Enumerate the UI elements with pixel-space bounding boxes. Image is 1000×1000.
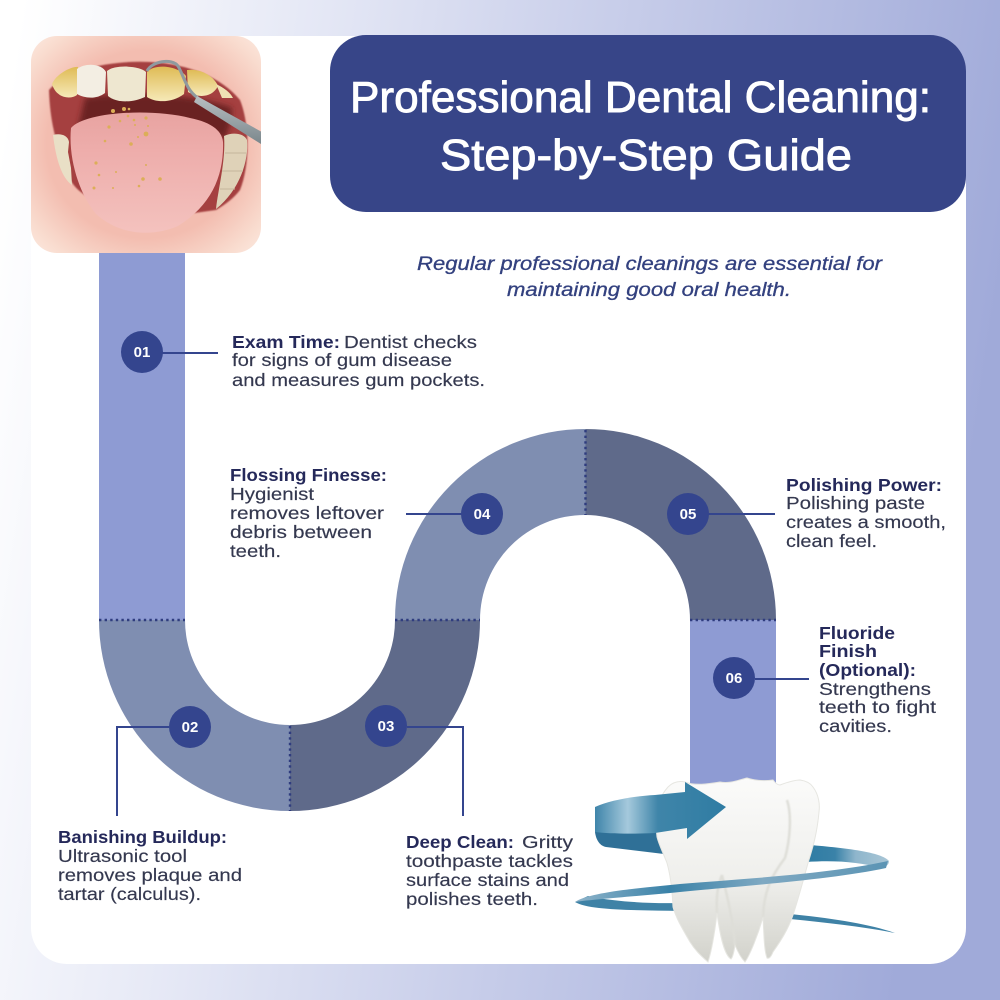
step 01 text: Dentist checks — [344, 332, 477, 352]
step 04 text — [230, 465, 387, 561]
dental scaler handle — [194, 96, 262, 144]
step 01 marker — [121, 331, 218, 373]
title — [350, 73, 931, 180]
tongue — [71, 113, 223, 233]
step 04 text: Flossing Finesse: — [230, 465, 387, 485]
step 04 text: teeth. — [230, 541, 281, 561]
step 03 marker — [365, 705, 463, 816]
step 03 marker: 03 — [378, 718, 394, 735]
subtitle: Regular professional cleanings are essential for — [417, 254, 883, 275]
title: Step-by-Step Guide — [440, 131, 852, 180]
ribbon back right — [806, 845, 889, 868]
step 06 text — [819, 623, 936, 736]
step 06 text: (Optional): — [819, 660, 916, 680]
step 05 text: Polishing paste — [786, 493, 925, 513]
step 05 marker — [667, 493, 775, 535]
tooth — [656, 778, 819, 962]
segment 02: first curve left half — [99, 620, 290, 811]
step 04 marker — [406, 493, 503, 535]
arrow — [595, 782, 726, 839]
step 06 text: Finish — [819, 641, 877, 661]
tooth root shading — [717, 800, 790, 945]
ribbon under arrow — [595, 832, 664, 854]
step 01 text: Exam Time: — [232, 332, 340, 352]
step 04 text: Hygienist — [230, 484, 314, 504]
step 06 text: teeth to fight — [819, 697, 936, 717]
step 01 marker: 01 — [134, 344, 150, 361]
lower teeth right — [216, 134, 247, 209]
dental scaler hook — [147, 61, 198, 98]
step 06 marker: 06 — [726, 670, 742, 687]
lower teeth left — [53, 134, 72, 185]
step 01 text — [232, 332, 485, 390]
step 01 text: for signs of gum disease — [232, 350, 452, 370]
step 01 text: and measures gum pockets. — [232, 370, 485, 390]
plaque specks — [92, 107, 162, 190]
segment 05: arch right half — [586, 429, 776, 620]
winding path — [99, 253, 776, 811]
icon: tooth with circular blue arrow — [575, 778, 895, 962]
step 04 marker: 04 — [474, 506, 491, 523]
step 03 text: Gritty — [522, 832, 573, 852]
segment 03: first curve right half — [290, 620, 480, 811]
step 06 text: Fluoride — [819, 623, 895, 643]
step 02 text: Ultrasonic tool — [58, 846, 187, 866]
step 02 text: tartar (calculus). — [58, 884, 201, 904]
step 02 text: Banishing Buildup: — [58, 827, 227, 847]
step 02 text: removes plaque and — [58, 865, 242, 885]
segment 01: left strip — [99, 253, 185, 620]
step 05 marker: 05 — [680, 506, 696, 523]
upper teeth — [52, 67, 78, 97]
step 05 text: clean feel. — [786, 531, 877, 551]
step 06 text: cavities. — [819, 716, 892, 736]
step 03 text — [406, 832, 573, 909]
step 04 text: debris between — [230, 522, 372, 542]
step 05 text: Polishing Power: — [786, 475, 942, 495]
step 02 marker: 02 — [182, 719, 198, 736]
step 03 text: toothpaste tackles — [406, 851, 573, 871]
ribbon front — [575, 861, 888, 902]
step 03 text: polishes teeth. — [406, 889, 538, 909]
title panel — [330, 35, 966, 212]
step 02 marker — [117, 706, 211, 816]
step 06 text: Strengthens — [819, 679, 931, 699]
step 06 marker — [713, 657, 809, 699]
step 03 text: Deep Clean: — [406, 832, 514, 852]
step 02 text — [58, 827, 242, 904]
step 03 text: surface stains and — [406, 870, 569, 890]
subtitle: maintaining good oral health. — [507, 280, 791, 301]
step 04 text: removes leftover — [230, 503, 384, 523]
step 05 text — [786, 475, 946, 551]
step 05 text: creates a smooth, — [786, 512, 946, 532]
segment 06: right strip — [690, 620, 776, 792]
photo: open mouth with plaque and dental scaler — [31, 36, 262, 253]
subtitle — [417, 254, 883, 301]
ribbon back left and tail — [575, 896, 895, 933]
segment 04: arch left half — [395, 429, 586, 620]
title: Professional Dental Cleaning: — [350, 73, 931, 122]
mouth opening — [49, 62, 248, 215]
